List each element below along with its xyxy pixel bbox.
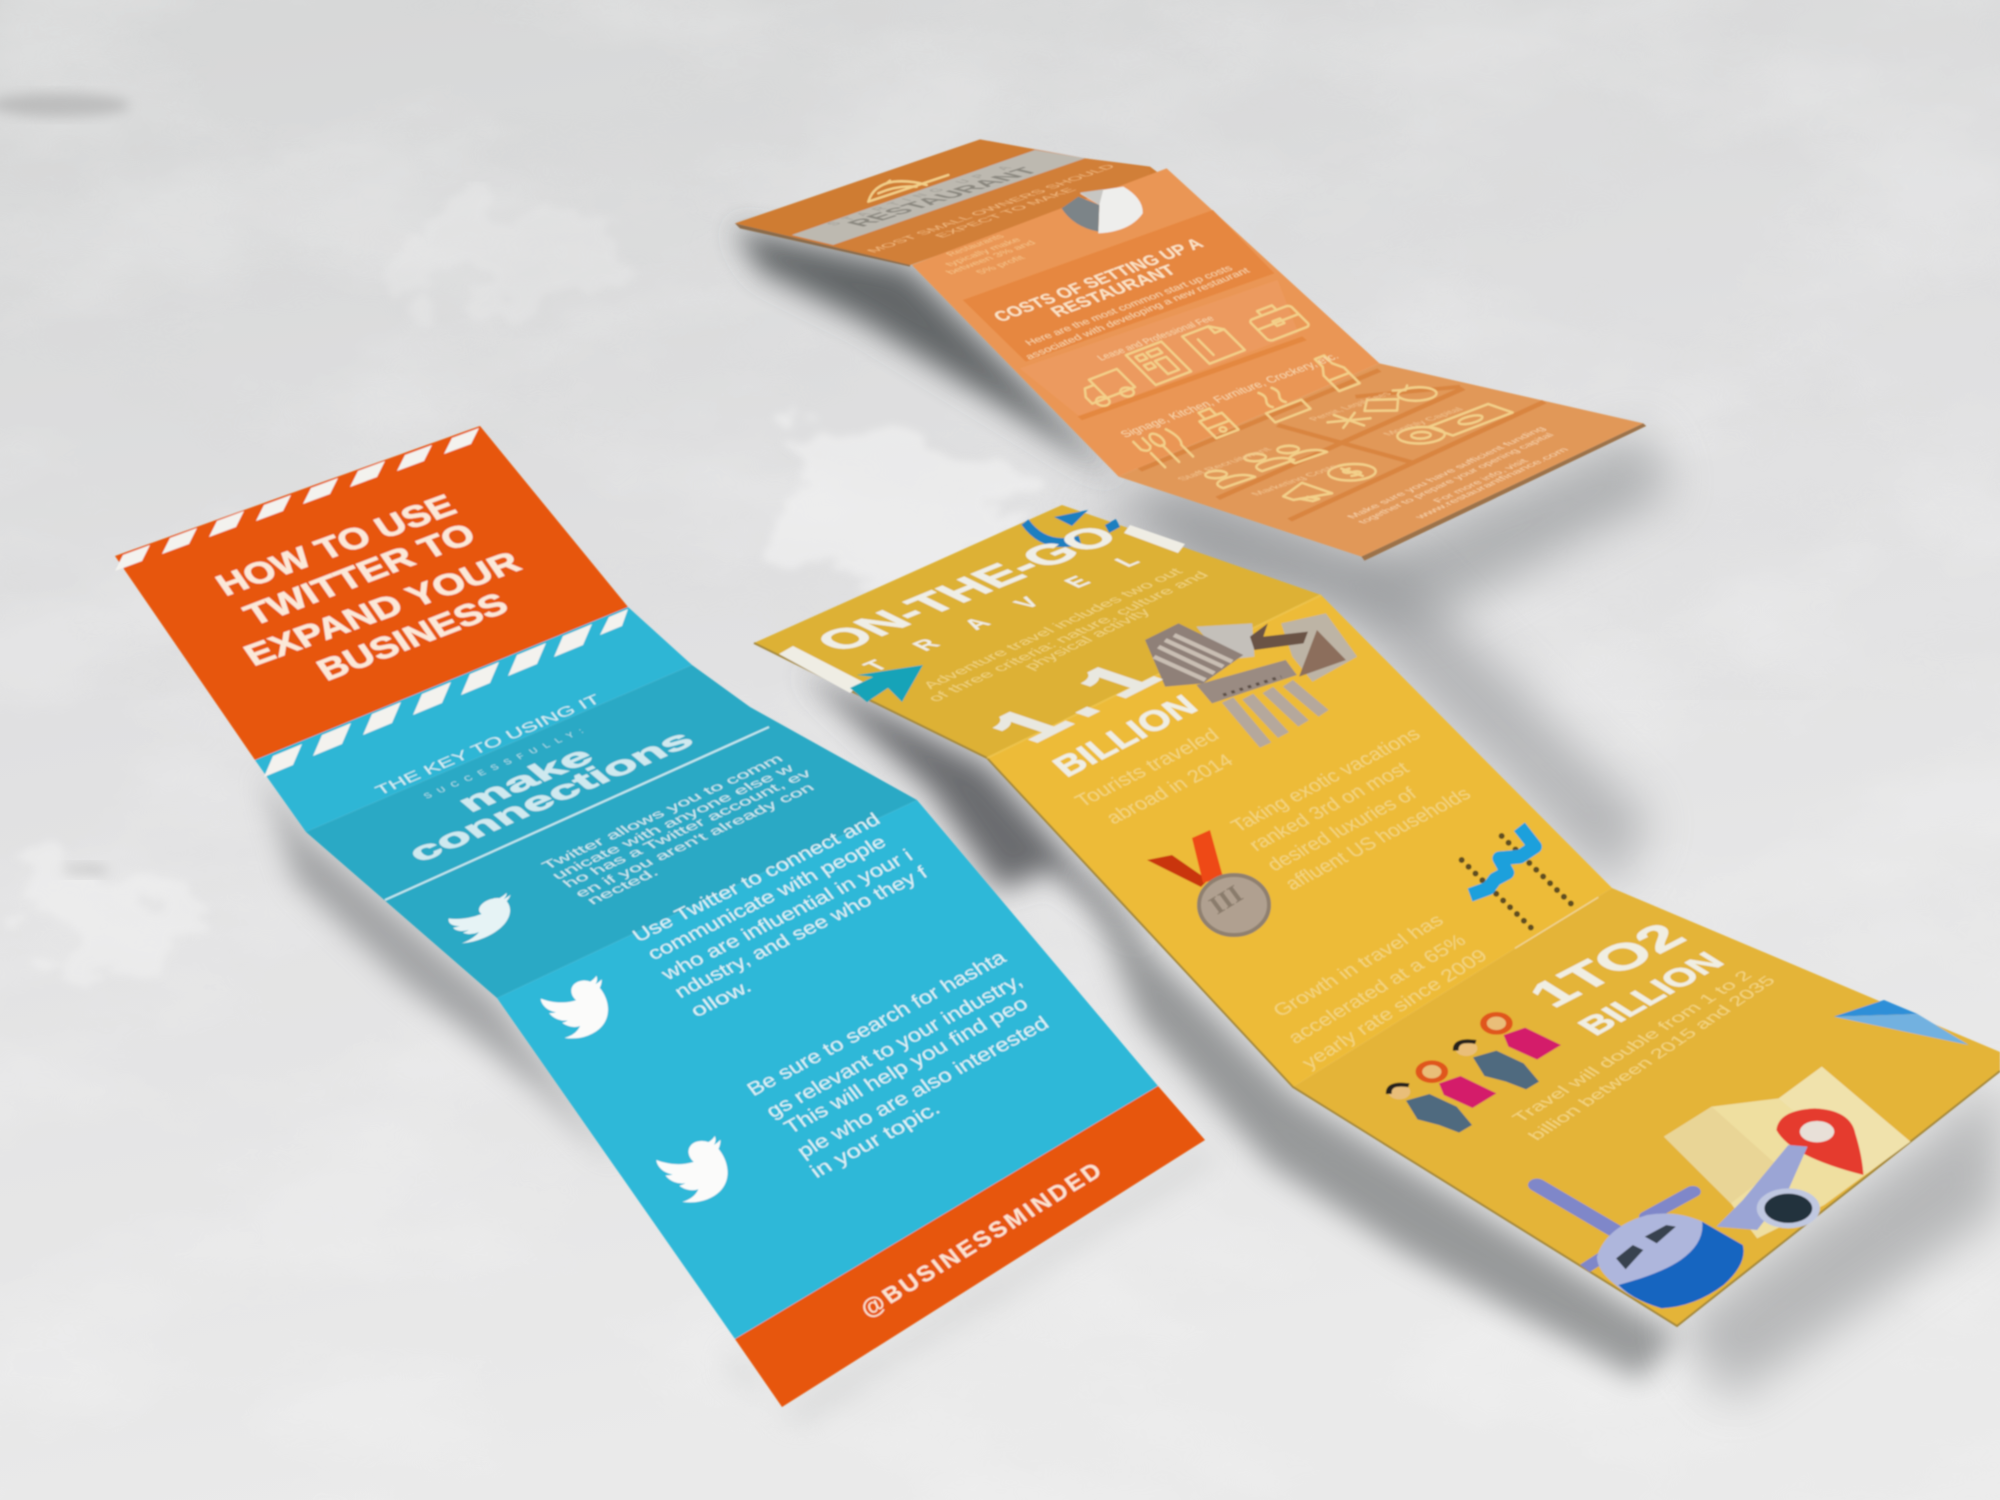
text: growth in travel — [1269, 910, 1492, 1073]
restaurant brochure heading and text: Lease and Professional Fee — [1095, 314, 1217, 363]
white stripes on cover top — [115, 428, 479, 571]
text: paragraph two: ollow. — [686, 976, 756, 1021]
restaurant brochure heading and text: associated with developing a new restaurant — [1023, 266, 1252, 362]
text: travel will double: billion between 2015 and 2035 — [1524, 973, 1779, 1143]
stat: 1 to 2 billion: 1TO2 — [1516, 915, 1698, 1015]
stat: 1.1 billion: BILLION — [1045, 689, 1205, 783]
text: paragraph three: This will help you find peo — [780, 993, 1032, 1138]
heading: the key to using it: SUCCESSFULLY: — [422, 727, 585, 800]
restaurant brochure heading and text: RESTAURANT — [1046, 261, 1180, 320]
text: exotic vacations: desired luxuries of — [1263, 784, 1421, 875]
icon: bronze medal — [1147, 830, 1269, 935]
stat: 1 to 2 billion — [1516, 915, 1732, 1041]
restaurant brochure heading and text: MOST SMALL OWNERS SHOULD — [863, 163, 1119, 254]
icon: teal arrow — [850, 665, 923, 702]
icon: world monuments — [1145, 613, 1357, 745]
restaurant brochure heading and text: together to prepare your opening capital — [1355, 432, 1557, 525]
title: How to use Twitter — [209, 489, 528, 688]
heading: the key to using it: THE KEY TO USING IT — [372, 692, 604, 799]
footer handle: @BUSINESSMINDED — [855, 1158, 1106, 1322]
title: How to use Twitter: HOW TO USE — [209, 489, 463, 603]
text: paragraph three — [743, 947, 1053, 1182]
restaurant brochure heading and text: between 3% and — [944, 240, 1039, 276]
icon: Twitter bird three — [650, 1134, 752, 1207]
icon: paper plane fragment — [1834, 1000, 1969, 1045]
stat: 1 to 2 billion: BILLION — [1570, 947, 1732, 1041]
intro paragraph — [919, 566, 1213, 704]
restaurant brochure heading and text: COSTS OF SETTING UP A — [989, 235, 1208, 325]
intro paragraph: of three criteria: nature, culture and — [924, 570, 1213, 704]
icon: Twitter bird two — [535, 974, 631, 1043]
restaurant brochure heading and text: RESTAURANT — [840, 166, 1046, 228]
orange footer band — [735, 1086, 1205, 1407]
icon: Twitter bird one — [443, 892, 529, 946]
restaurant brochure bottom panel — [1119, 363, 1646, 561]
icon: bronze medal: III — [1203, 879, 1248, 920]
heading: the key to using it — [372, 692, 702, 868]
restaurant brochure middle panel — [912, 168, 1379, 477]
text: paragraph one: unicate with anyone else w — [549, 762, 799, 882]
subtitle: TRAVEL: T R A V E L — [857, 553, 1146, 675]
icon: folded map — [1664, 1067, 1910, 1238]
chart: growth line with dotted columns — [1462, 827, 1598, 948]
traveller two — [1419, 1063, 1496, 1108]
text: travel will double: Travel will double from 1 to 2 — [1508, 968, 1756, 1125]
white stripes on cover bottom — [264, 609, 628, 777]
restaurant brochure heading and text: Monthly Capital — [1380, 407, 1467, 437]
intro paragraph: Adventure travel includes two out — [919, 566, 1188, 691]
icon: airplane — [1537, 1145, 1820, 1308]
pie chart — [1062, 187, 1143, 233]
icons: start-up cost line icons — [1074, 300, 1513, 504]
text: paragraph three: ple who are also interested — [793, 1013, 1053, 1162]
icon: group of travellers — [1388, 1014, 1561, 1133]
title: How to use Twitter: BUSINESS — [310, 587, 515, 688]
shadows cast by the folded sheets — [262, 228, 2000, 1425]
title: How to use Twitter: TWITTER TO — [237, 517, 483, 633]
text: exotic vacations: ranked 3rd on most — [1245, 758, 1414, 855]
traveller four — [1484, 1014, 1561, 1060]
text: paragraph two: communicate with people — [643, 832, 890, 964]
panel: restaurant brochure (orange) — [735, 139, 1646, 561]
restaurant brochure heading and text: EXPECT TO MAKE — [931, 187, 1080, 239]
restaurant brochure heading and text: Make sure you have sufficient funding — [1344, 426, 1549, 520]
restaurant brochure heading and text: Here are the most common start up costs — [1023, 264, 1236, 348]
traveller one — [1388, 1084, 1472, 1133]
restaurant brochure heading and text: For more info, visit — [1430, 458, 1532, 504]
text: exotic vacations — [1227, 724, 1475, 894]
restaurant brochure heading and text: Restaurants — [944, 233, 1008, 258]
text: tourists traveled: Tourists traveled — [1071, 725, 1224, 811]
text: paragraph two: ndustry, and see who they f — [670, 862, 932, 1002]
text: tourists traveled: abroad in 2014 — [1102, 751, 1238, 828]
text: paragraph three: Be sure to search for hashta — [743, 947, 1011, 1100]
logo: blue arc and triangle — [1025, 510, 1118, 543]
text: paragraph two: who are influential in your i — [656, 846, 917, 985]
text: exotic vacations: Taking exotic vacations — [1227, 724, 1425, 836]
text: paragraph three: in your topic. — [806, 1098, 945, 1182]
restaurant brochure heading and text — [822, 163, 1572, 525]
stat: 1.1 billion: 1.1 — [967, 656, 1190, 753]
restaurant brochure heading and text: Marketing Costs — [1248, 464, 1342, 497]
restaurant brochure heading and text: Signage, Kitchen, Furniture, Crockery, etc. — [1117, 350, 1342, 440]
restaurant brochure heading and text: Staff Recruitment — [1174, 447, 1275, 482]
orange cover panel — [115, 426, 628, 760]
restaurant brochure heading and text: typically make — [943, 237, 1024, 268]
traveller three — [1455, 1041, 1539, 1089]
text: paragraph two — [628, 809, 932, 1021]
icon: red location pin — [1776, 1108, 1863, 1175]
panel: Twitter brochure (blue and orange) — [115, 426, 1205, 1407]
panel: travel brochure (yellow) — [754, 505, 2000, 1326]
restaurant brochure heading and text: STARTING UP A — [822, 165, 1015, 227]
Twitter brochure blue paper panels — [255, 607, 1158, 1339]
text: travel will double — [1508, 968, 1779, 1143]
restaurant brochure heading and text: 5% profit — [974, 255, 1028, 276]
text: paragraph one: ho has a Twitter account, ev — [560, 767, 816, 890]
heading: the key to using it: connections — [399, 725, 702, 868]
restaurant brochure heading and text: Permit, Legal Fees — [1306, 391, 1395, 422]
text: paragraph one — [539, 753, 818, 907]
text: growth in travel: accelerated at a 65% — [1284, 930, 1470, 1048]
divider line — [385, 727, 769, 900]
white header bars — [779, 525, 1185, 693]
text: paragraph one: Twitter allows you to comm — [539, 753, 787, 872]
text: growth in travel: yearly rate since 2009 — [1298, 946, 1492, 1073]
text: exotic vacations: affluent US households — [1281, 784, 1475, 894]
restaurant brochure heading and text: www.restaurantfinance.com — [1411, 447, 1572, 520]
heading: the key to using it: make — [449, 742, 602, 818]
title: How to use Twitter: EXPAND YOUR — [237, 546, 528, 673]
text: paragraph two: Use Twitter to connect and — [628, 809, 884, 946]
text: paragraph one: nected. — [584, 866, 662, 907]
text: growth in travel: Growth in travel has — [1269, 910, 1448, 1021]
travel brochure paper panels — [754, 505, 2000, 1326]
text: paragraph three: gs relevant to your industry, — [762, 971, 1027, 1122]
intro paragraph: physical activity — [1020, 606, 1155, 672]
title: ON-THE-GO: ON-THE-GO — [803, 519, 1131, 657]
text: paragraph one: en if you aren't already con — [572, 782, 818, 900]
restaurant brochure top fold — [735, 139, 1163, 267]
